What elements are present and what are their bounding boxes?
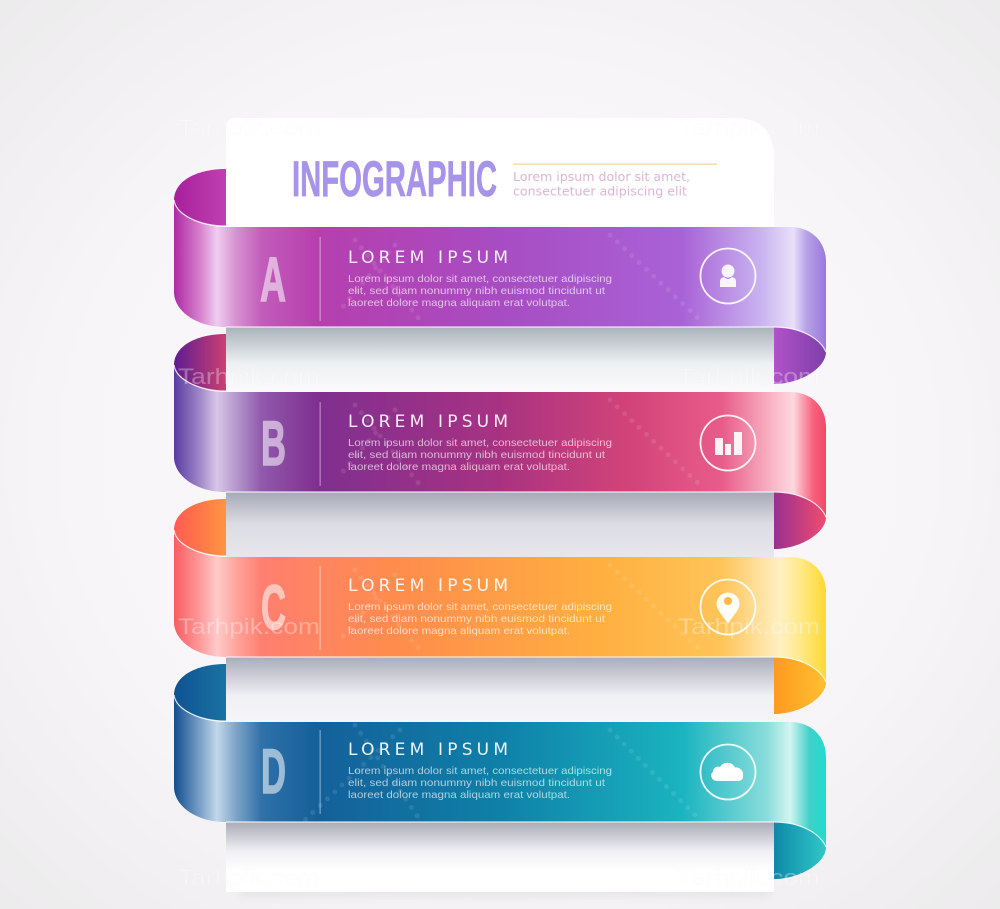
text block B: Lorem ipsum dolor sit amet, consectetuer adipiscing xyxy=(348,437,612,449)
letter A: A xyxy=(260,245,286,315)
watermarks: Tarhpik.com xyxy=(178,115,320,140)
letter B: B xyxy=(261,409,286,479)
panel: ribbon C xyxy=(174,499,826,714)
text block C xyxy=(348,601,612,637)
panel: white background card xyxy=(226,118,774,892)
text block B: laoreet dolore magna aliquam erat volutpat. xyxy=(348,461,570,473)
watermarks: Tarhpik.com xyxy=(678,865,820,890)
text block C: elit, sed diam nonummy nibh euismod tincidunt ut xyxy=(348,613,605,625)
text block D: Lorem ipsum dolor sit amet, consectetuer adipiscing xyxy=(348,765,612,777)
title: INFOGRAPHIC: INFOGRAPHIC xyxy=(292,151,497,207)
text block D: elit, sed diam nonummy nibh euismod tincidunt ut xyxy=(348,777,605,789)
icon: bar chart xyxy=(700,416,756,470)
icon: location pin xyxy=(700,580,756,634)
panel: ribbon A xyxy=(174,169,826,384)
heading A: LOREM IPSUM xyxy=(348,248,508,268)
heading C: LOREM IPSUM xyxy=(348,576,508,596)
text block B: elit, sed diam nonummy nibh euismod tincidunt ut xyxy=(348,449,605,461)
text block A: Lorem ipsum dolor sit amet, consectetuer adipiscing xyxy=(348,273,612,285)
text block C: Lorem ipsum dolor sit amet, consectetuer adipiscing xyxy=(348,601,612,613)
heading D: LOREM IPSUM xyxy=(348,740,508,760)
text block A: laoreet dolore magna aliquam erat volutpat. xyxy=(348,297,570,309)
text block C: laoreet dolore magna aliquam erat volutpat. xyxy=(348,625,570,637)
text block D xyxy=(348,765,612,801)
text block A xyxy=(348,273,612,309)
subtitle block: Lorem ipsum dolor sit amet, xyxy=(513,170,690,184)
watermarks xyxy=(178,115,820,890)
watermarks: Tarhpik.com xyxy=(178,614,320,639)
icon: user xyxy=(700,248,756,304)
watermarks: Tarhpik.com xyxy=(178,865,320,890)
watermarks: Tarhpik.com xyxy=(678,115,820,140)
heading B: LOREM IPSUM xyxy=(348,412,508,432)
letter D: D xyxy=(261,737,286,807)
subtitle block xyxy=(513,164,717,198)
letter C: C xyxy=(261,573,286,643)
icon: cloud xyxy=(700,744,756,800)
text block B xyxy=(348,437,612,473)
subtitle block: consectetuer adipiscing elit xyxy=(513,184,687,198)
text block A: elit, sed diam nonummy nibh euismod tincidunt ut xyxy=(348,285,605,297)
text block D: laoreet dolore magna aliquam erat volutpat. xyxy=(348,789,570,801)
watermarks: Tarhpik.com xyxy=(678,614,820,639)
panel: ribbon B xyxy=(174,334,826,549)
panel: ribbon D xyxy=(174,664,826,879)
watermarks: Tarhpik.com xyxy=(178,364,320,389)
watermarks: Tarhpik.com xyxy=(678,364,820,389)
